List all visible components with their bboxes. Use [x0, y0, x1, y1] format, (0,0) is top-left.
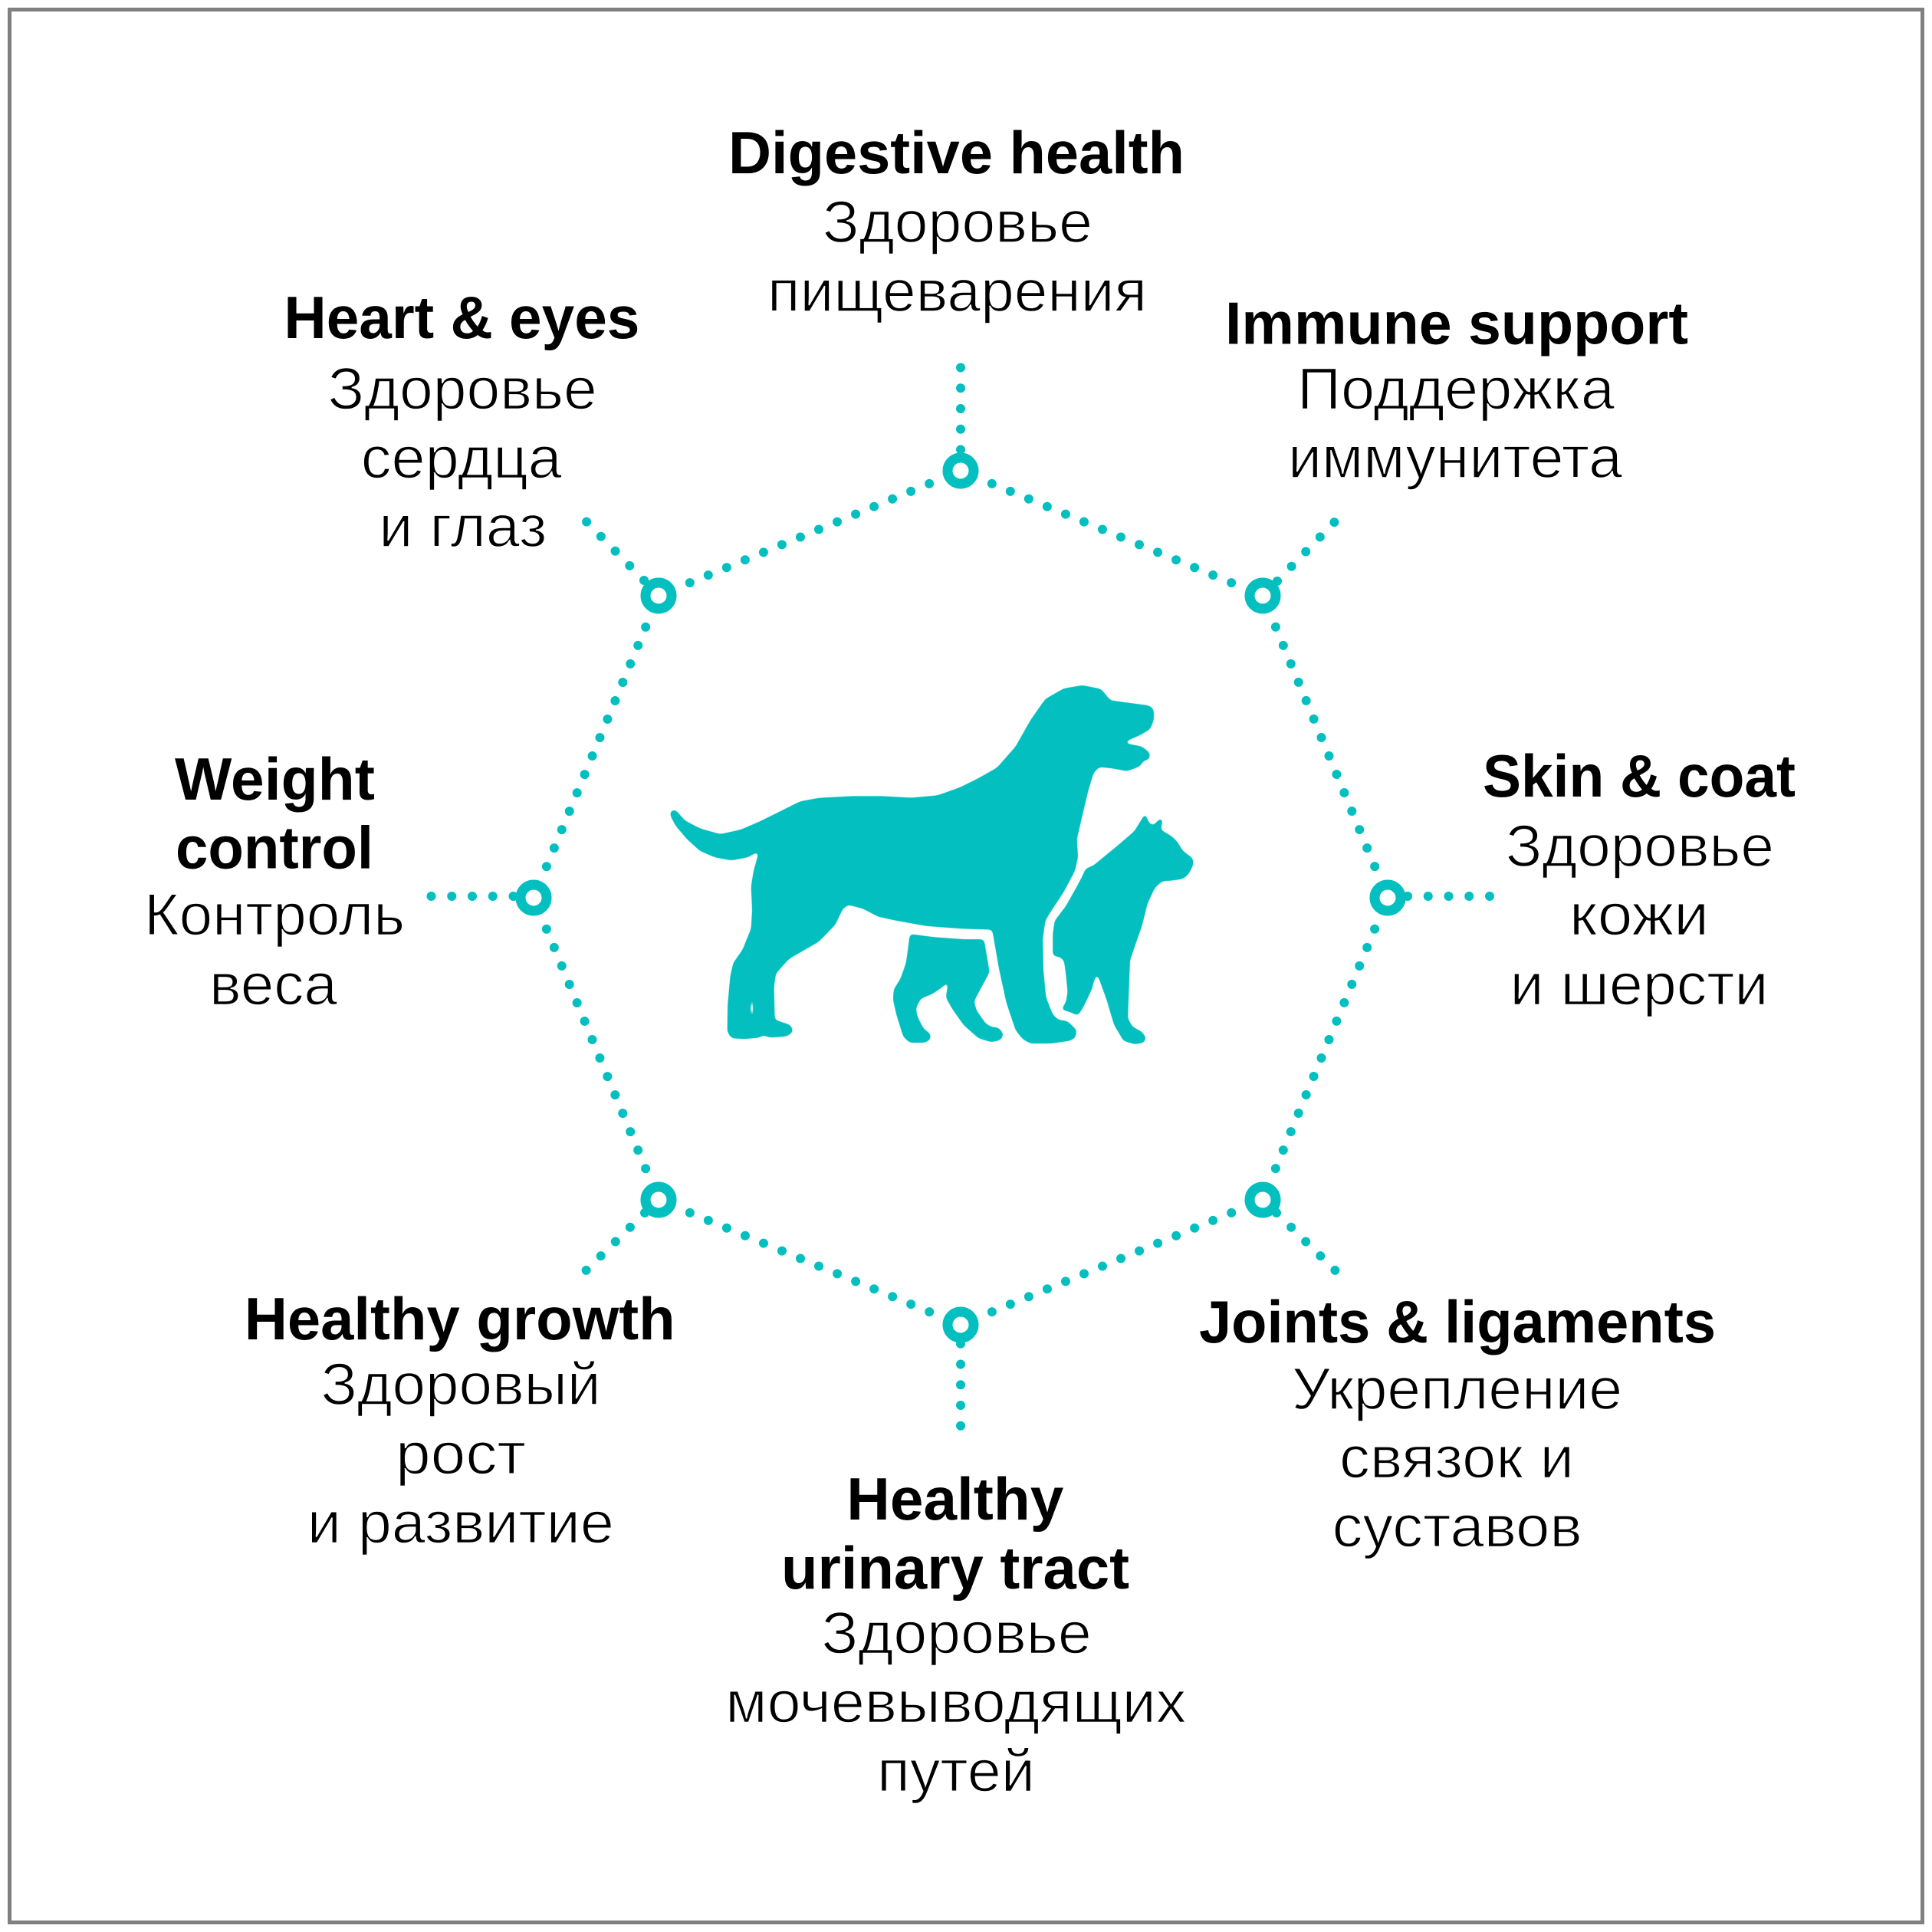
label: skin and coat: Skin & coat [1483, 742, 1796, 810]
cat body [1053, 813, 1193, 1044]
label: heart and eyes: Здоровье [328, 356, 597, 422]
label: healthy growth: рост [396, 1421, 526, 1487]
label: skin and coat: кожи [1569, 882, 1709, 948]
label: healthy growth [245, 1285, 675, 1556]
label: digestive health: Здоровье [823, 189, 1092, 255]
dog far hind leg [893, 934, 1004, 1043]
node: skin and coat [1375, 885, 1401, 911]
dotted octagon ring connecting the eight nodes [547, 484, 1375, 1312]
label: heart and eyes: Heart & eyes [284, 284, 639, 351]
label: weight control: веса [209, 952, 337, 1018]
label: healthy urinary tract: путей [877, 1739, 1035, 1805]
label: joints and ligaments: Joints & ligaments [1199, 1288, 1716, 1355]
icon: dog and cat silhouette [670, 685, 1193, 1044]
node: joints and ligaments [1250, 1187, 1276, 1213]
label: skin and coat: и шерсти [1510, 952, 1768, 1018]
label: healthy growth: Healthy growth [245, 1285, 675, 1352]
node: urinary tract [948, 1312, 974, 1338]
label: healthy urinary tract: мочевыводящих [725, 1670, 1186, 1736]
label: weight control: Weight [175, 745, 375, 813]
label: healthy growth: Здоровый [321, 1352, 601, 1418]
label: weight control [144, 745, 405, 1018]
label: healthy urinary tract: Здоровье [822, 1600, 1092, 1666]
label: digestive health: Digestive health [728, 119, 1184, 186]
node: heart and eyes [646, 583, 672, 609]
label: healthy urinary tract: urinary tract [781, 1534, 1129, 1602]
label: digestive health: пищеварения [767, 258, 1147, 324]
label: weight control: control [176, 814, 373, 882]
label: immune support: иммунитета [1288, 425, 1622, 491]
label: healthy urinary tract [725, 1465, 1186, 1805]
label: heart and eyes: сердца [361, 425, 562, 491]
label: healthy urinary tract: Healthy [846, 1465, 1063, 1533]
label: skin and coat: Здоровье [1506, 813, 1774, 879]
label: skin and coat [1483, 742, 1796, 1018]
label: weight control: Контроль [144, 882, 405, 948]
node: digestive health [948, 458, 974, 484]
dotted spokes leading to each label [431, 367, 1490, 1426]
label: immune support [1225, 290, 1688, 491]
label: healthy growth: и развитие [307, 1490, 614, 1556]
label: digestive health [728, 119, 1184, 324]
label: joints and ligaments: суставов [1332, 1493, 1582, 1559]
dog body [670, 685, 1154, 1043]
label: heart and eyes: и глаз [379, 494, 547, 560]
label: joints and ligaments [1199, 1288, 1716, 1559]
label: immune support: Поддержка [1297, 356, 1615, 422]
label: joints and ligaments: Укрепление [1292, 1356, 1622, 1422]
label: heart and eyes [284, 284, 639, 560]
node: healthy growth [646, 1187, 672, 1213]
node: immune support [1250, 583, 1276, 609]
label: joints and ligaments: связок и [1339, 1425, 1574, 1491]
label: immune support: Immune support [1225, 290, 1688, 357]
node: weight control [521, 885, 547, 911]
